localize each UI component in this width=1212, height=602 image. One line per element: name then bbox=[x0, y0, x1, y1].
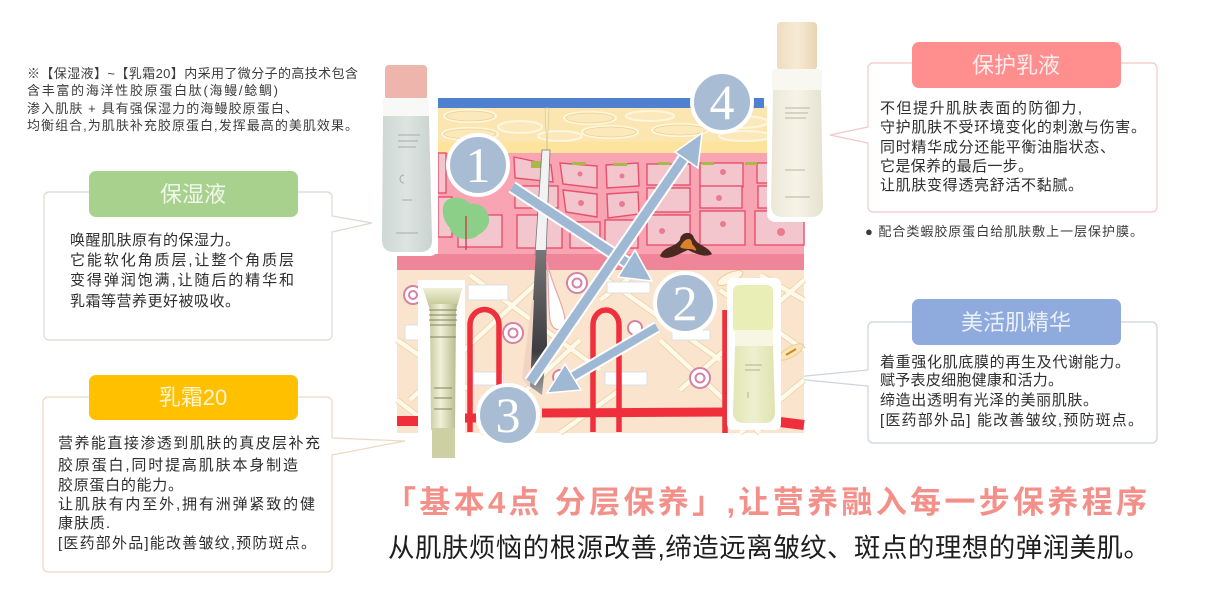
text: 保护乳液 description: 让肌肤变得透亮舒活不黏腻。 bbox=[880, 177, 1083, 194]
heading: 保护乳液: 保护乳液 bbox=[972, 53, 1060, 78]
icon: bottle 保湿液 bbox=[382, 65, 432, 252]
badge: 3: 3 bbox=[496, 387, 520, 443]
elastin rings bbox=[404, 273, 710, 388]
text: 乳霜20 description: 让肌肤有内至外,拥有洲弹紧致的健 bbox=[58, 496, 315, 513]
heading: 保湿液 bbox=[89, 171, 298, 217]
text: 保护乳液 description bbox=[880, 100, 1146, 194]
text: 保湿液 description bbox=[70, 232, 294, 310]
dermis bbox=[397, 268, 806, 433]
panel: 保湿液 bbox=[44, 171, 372, 340]
icon: bottle 保护乳液 bbox=[771, 22, 823, 217]
text: 乳霜20 description: 胶原蛋白,同时提高肌肤本身制造 bbox=[58, 457, 298, 474]
arrow: 2 to 3 bbox=[547, 327, 657, 393]
heading: 保湿液: 保湿液 bbox=[160, 182, 226, 207]
text: 保湿液 description: 变得弹润饱满,让随后的精华和 bbox=[70, 272, 294, 289]
heading: 美活肌精华 bbox=[912, 299, 1121, 345]
basal band bbox=[397, 254, 804, 270]
badge: 2 bbox=[655, 273, 715, 333]
text: 美活肌精华 description: 缔造出透明有光泽的美丽肌肤。 bbox=[880, 392, 1098, 409]
note: 保护乳液: ● 配合类蝦胶原蛋白给肌肤敷上一层保护膜。 bbox=[865, 224, 1143, 239]
text: 保湿液 description: 唤醒肌肤原有的保湿力。 bbox=[70, 232, 240, 249]
text: 保护乳液 description: 它是保养的最后一步。 bbox=[880, 157, 1033, 175]
text: 美活肌精华 description: 赋予表皮细胞健康和活力。 bbox=[880, 372, 1063, 389]
heading: 乳霜20: 乳霜20 bbox=[159, 385, 227, 410]
badge: 4 bbox=[692, 72, 752, 132]
heading: 乳霜20 bbox=[89, 375, 298, 420]
badge: 1: 1 bbox=[466, 137, 490, 193]
badge: 3 bbox=[478, 385, 538, 445]
brown spot bbox=[660, 233, 712, 258]
epidermis beige layer bbox=[438, 106, 804, 154]
subheadline: 从肌肤烦恼的根源改善,缔造远离皱纹、斑点的理想的弹润美肌。 bbox=[388, 533, 1150, 563]
arrow: 1 to 2 bbox=[512, 187, 652, 281]
badge: 4: 4 bbox=[710, 74, 734, 130]
text: 保护乳液 description: 不但提升肌肤表面的防御力, bbox=[880, 100, 1082, 117]
hair follicle bbox=[522, 108, 565, 395]
capillaries bbox=[397, 309, 804, 433]
red vein bbox=[465, 216, 467, 250]
icon: bottle 美活肌精华 bbox=[733, 285, 775, 423]
badge: 2: 2 bbox=[672, 275, 698, 331]
badge: 1 bbox=[448, 135, 508, 195]
text: 美活肌精华 description: [医药部外品] 能改善皱纹,预防斑点。 bbox=[880, 412, 1143, 429]
green patch bbox=[443, 198, 489, 239]
text: 乳霜20 description: [医药部外品]能改善皱纹,预防斑点。 bbox=[58, 535, 316, 552]
collagen capsules bbox=[715, 268, 806, 363]
arrow: 3 to 4 bbox=[530, 133, 702, 382]
heading: 美活肌精华: 美活肌精华 bbox=[961, 310, 1071, 335]
text: 乳霜20 description: 营养能直接渗透到肌肤的真皮层补充 bbox=[58, 434, 320, 452]
panel: 乳霜20 bbox=[43, 375, 405, 572]
headline: 「基本4点 分层保养」,让营养融入每一步保养程序 bbox=[385, 485, 1147, 520]
text: 保护乳液 description: 守护肌肤不受环境变化的刺激与伤害。 bbox=[880, 118, 1146, 136]
text: 保湿液 description: 它能软化角质层,让整个角质层 bbox=[70, 251, 294, 269]
top-left note: 渗入肌肤 + 具有强保湿力的海鳗胶原蛋白、 bbox=[27, 101, 298, 116]
top-left note: ※【保湿液】~【乳霜20】内采用了微分子的高技术包含 bbox=[27, 66, 358, 81]
text: 美活肌精华 description bbox=[880, 354, 1143, 429]
top-left note: 均衡组合,为肌肤补充胶原蛋白,发挥最高的美肌效果。 bbox=[27, 118, 358, 133]
heading: 保护乳液 bbox=[912, 42, 1121, 88]
text: 乳霜20 description: 康肤质. bbox=[58, 515, 110, 532]
panel: 美活肌精华 bbox=[785, 299, 1157, 443]
text: 保护乳液 description: 同时精华成分还能平衡油脂状态、 bbox=[880, 139, 1115, 156]
pink cell layer bbox=[438, 153, 804, 255]
collagen white blocks bbox=[405, 282, 710, 385]
panel: 保护乳液 bbox=[830, 42, 1157, 212]
product halos bbox=[376, 15, 829, 462]
icon: tube 乳霜20 bbox=[423, 288, 462, 458]
text: 保湿液 description: 乳霜等营养更好被吸收。 bbox=[70, 292, 240, 310]
text: 美活肌精华 description: 着重强化肌底膜的再生及代谢能力。 bbox=[880, 354, 1130, 371]
text: 乳霜20 description bbox=[58, 434, 320, 552]
blue surface bar bbox=[438, 98, 764, 108]
text: 乳霜20 description: 胶原蛋白的能力。 bbox=[58, 477, 183, 494]
top-left note bbox=[27, 66, 358, 133]
top-left note: 含丰富的海洋性胶原蛋白肽(海鳗/鲶鲷) bbox=[27, 83, 278, 98]
skin cross-section diagram bbox=[397, 98, 806, 433]
